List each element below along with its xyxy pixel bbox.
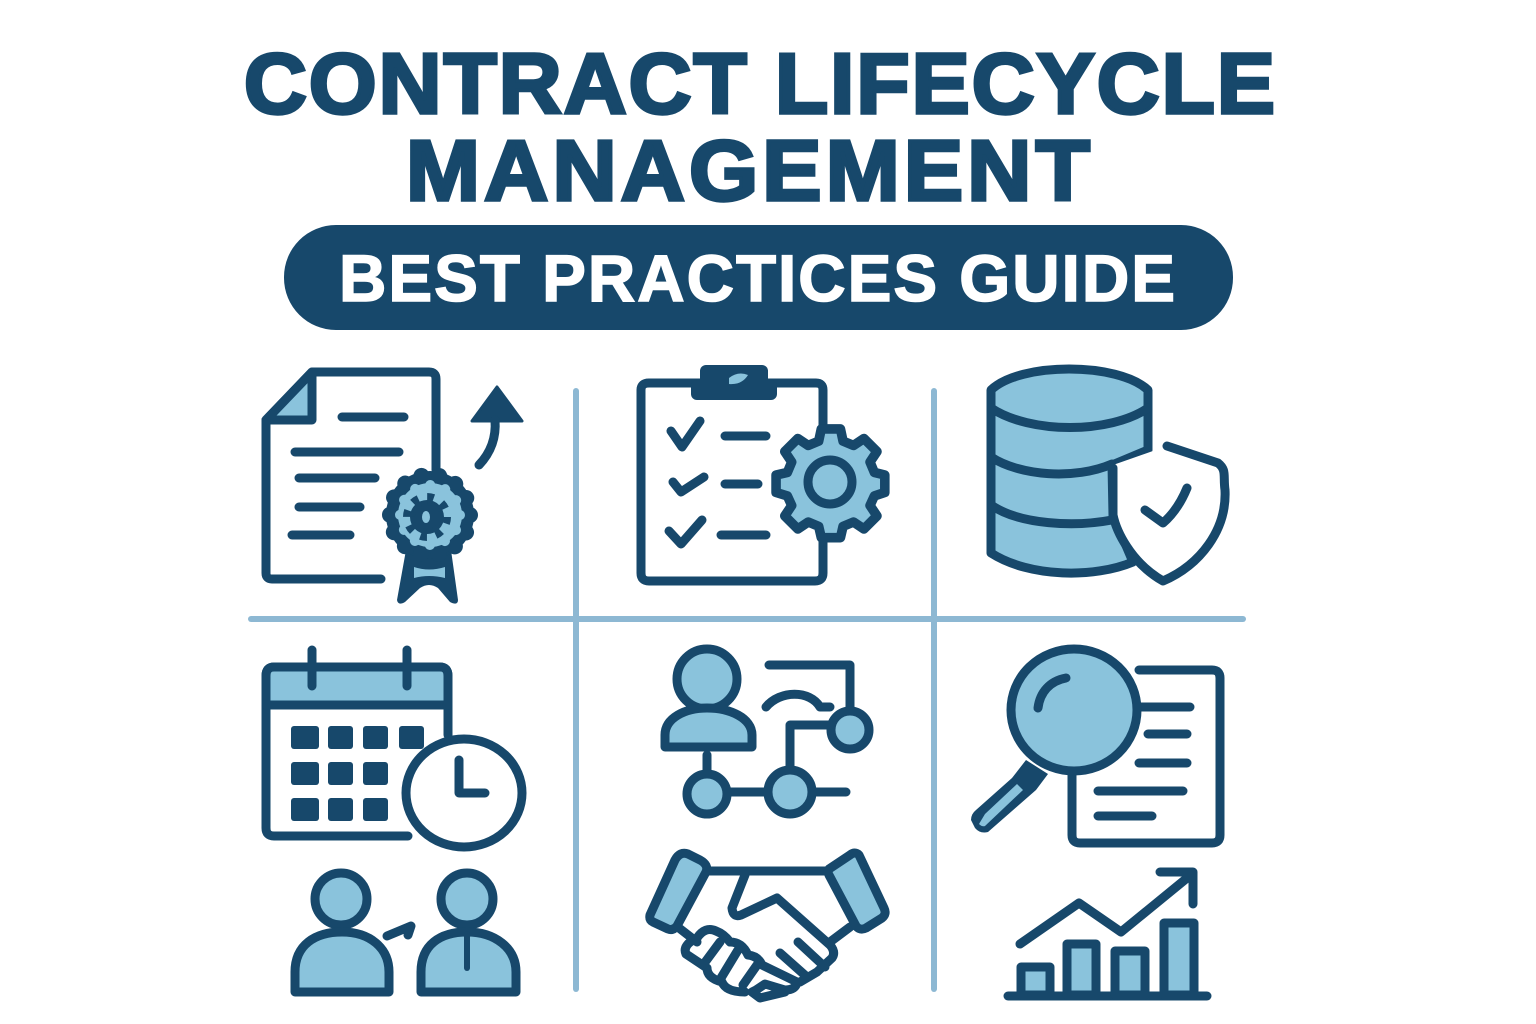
icon: workflow people and nodes bbox=[665, 649, 869, 814]
icon: handshake bbox=[650, 853, 885, 998]
icon: calendar with clock bbox=[266, 650, 522, 847]
title: MANAGEMENT bbox=[406, 124, 1094, 219]
icon: growth bar chart bbox=[1008, 872, 1207, 996]
title bbox=[244, 37, 1277, 219]
icon: magnifier over document bbox=[971, 649, 1220, 843]
icon: database with shield bbox=[991, 369, 1225, 581]
seal bbox=[386, 471, 474, 559]
subtitle banner: BEST PRACTICES GUIDE bbox=[339, 241, 1177, 315]
icon: two people exchanging bbox=[295, 873, 516, 992]
grid dividers bbox=[251, 391, 1243, 989]
icon: certified document with arrow bbox=[266, 372, 522, 604]
subtitle banner bbox=[284, 225, 1233, 330]
knuckles bbox=[685, 930, 797, 998]
magnifier handle bbox=[971, 760, 1048, 832]
seal ribbon bbox=[397, 550, 458, 604]
icon: checklist clipboard with gear bbox=[641, 365, 885, 581]
title: CONTRACT LIFECYCLE bbox=[244, 37, 1277, 132]
